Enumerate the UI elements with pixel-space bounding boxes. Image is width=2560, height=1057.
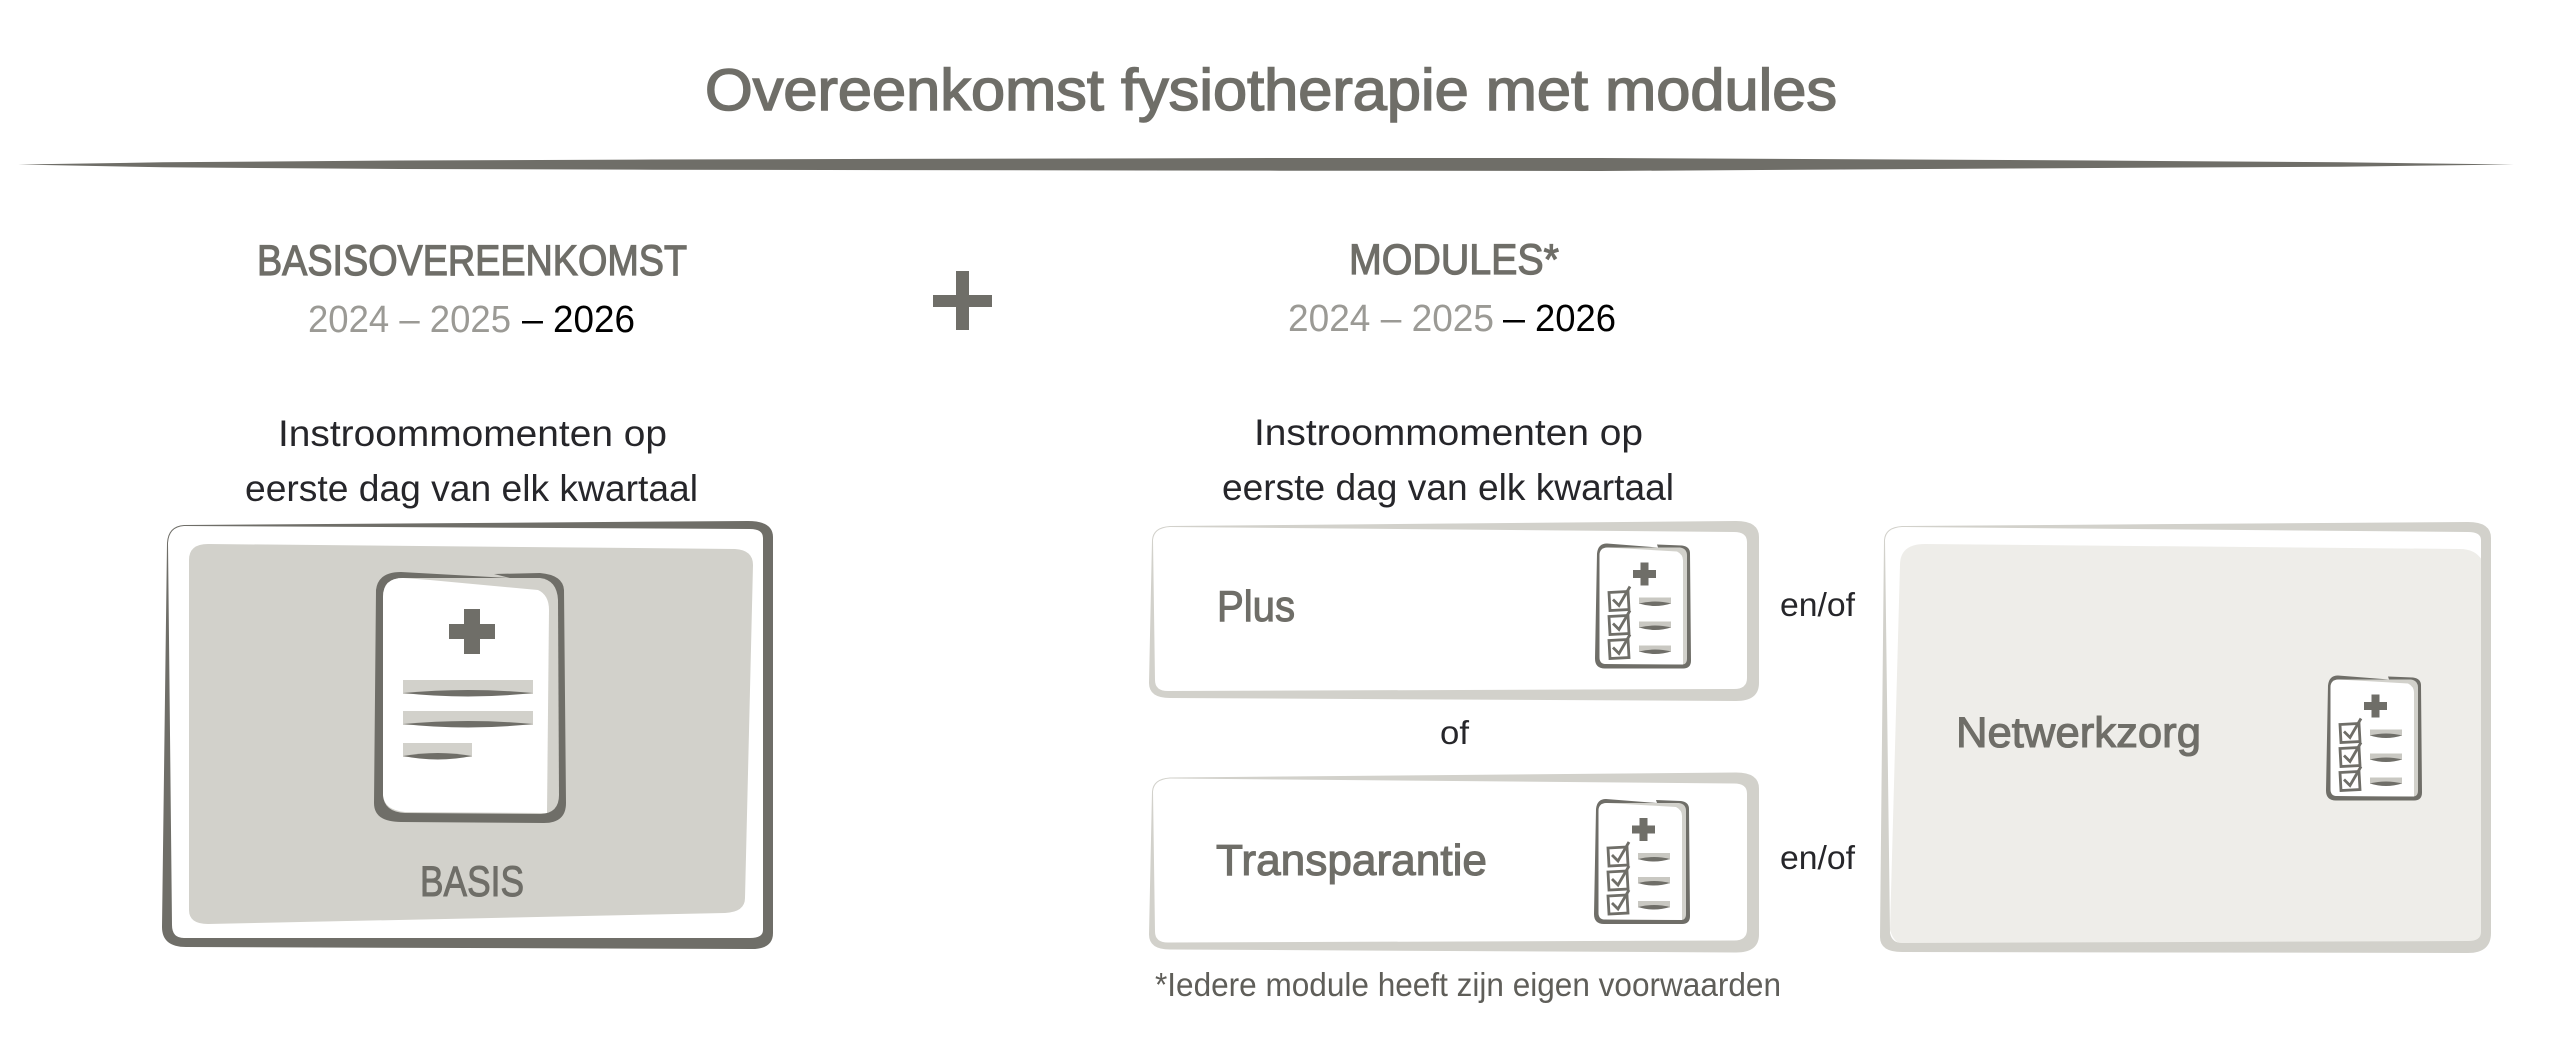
text: intake moments, basis [245,413,698,509]
years: basisovereenkomst [308,299,635,341]
text: intake moments, modules [1222,412,1674,508]
title: Overeenkomst fysiotherapie met modules [705,58,1837,123]
text: en/of lower: en/of [1780,839,1856,876]
text: intake moments, basis: eerste dag van elk kwartaal [245,468,698,509]
icon: basis document [374,572,566,823]
icon: netwerkzorg checklist [2326,676,2422,800]
text: of: of [1440,714,1470,751]
transparantie panel frame [1149,772,1759,952]
text: intake moments, modules: Instroommomenten op [1254,412,1643,453]
basis panel frame [162,521,773,949]
text: en/of upper: en/of [1780,586,1856,623]
years: modules: 2026 [1535,298,1616,340]
heading: basisovereenkomst: BASISOVEREENKOMST [257,237,687,285]
text: intake moments, basis: Instroommomenten op [278,413,667,454]
panel: netwerkzorg [1880,522,2491,953]
title divider [18,158,2514,171]
years: basisovereenkomst: – [522,299,544,341]
netwerkzorg label: Netwerkzorg [1956,709,2201,757]
years: modules: 2024 – 2025 [1288,298,1494,340]
text: intake moments, modules: eerste dag van elk kwartaal [1222,467,1674,508]
years: modules: – [1503,298,1526,340]
years: basisovereenkomst: 2026 [553,299,635,341]
years: modules [1288,298,1616,340]
panel: basis [162,521,773,949]
icon: plus between agreements [933,271,992,330]
years: basisovereenkomst: 2024 – 2025 [308,299,511,341]
panel: plus [1149,521,1759,701]
icon: plus checklist [1595,544,1691,668]
plus panel frame [1149,521,1759,701]
panel: transparantie [1149,772,1759,952]
icon: transparantie checklist [1594,799,1690,924]
transparantie label: Transparantie [1216,836,1487,885]
netwerkzorg panel frame [1880,522,2491,953]
netwerkzorg panel fill [1890,544,2482,944]
heading: modules: MODULES* [1349,236,1559,284]
basis label: BASIS [420,858,524,906]
basis panel fill [189,544,753,924]
footnote: *Iedere module heeft zijn eigen voorwaarden [1155,966,1781,1003]
plus label: Plus [1217,582,1295,631]
